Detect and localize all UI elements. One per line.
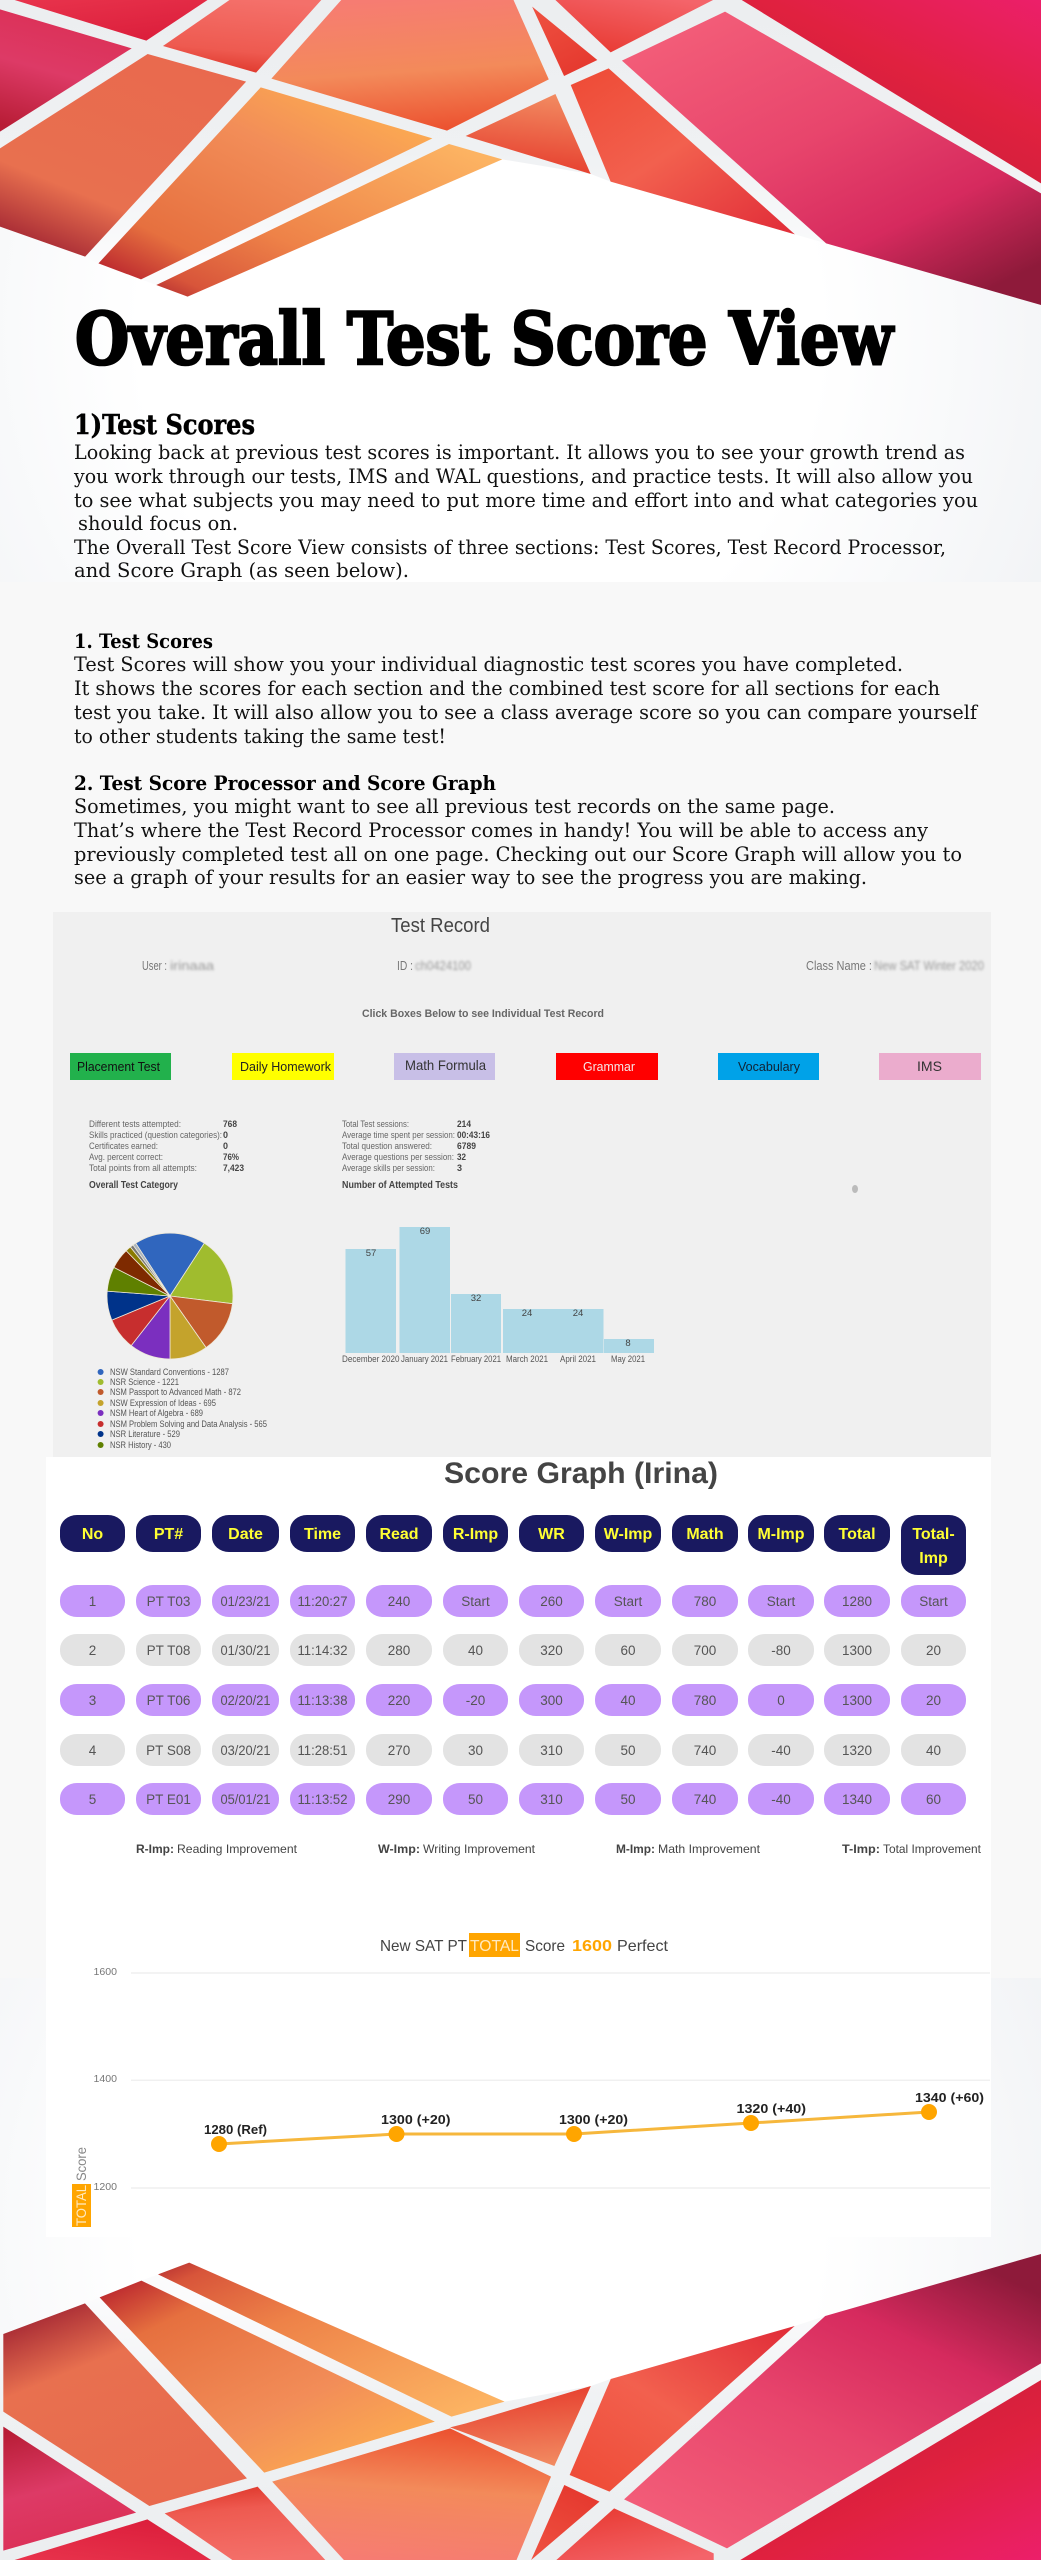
table row 4: 740: [694, 1743, 716, 1758]
stats: right column: 6789: [457, 1141, 476, 1151]
heading: 1) Test Scores: 1)Test Scores: [74, 410, 255, 441]
stats: right column: [342, 1119, 490, 1173]
table row 5: 1340: [842, 1792, 872, 1807]
table row 5: 05/01/21: [220, 1792, 270, 1807]
table row 5: 11:13:52: [298, 1792, 348, 1807]
bar chart: attempted tests: 8: [625, 1338, 631, 1349]
table row 4: -40: [771, 1743, 791, 1758]
pie legend: NSR History - 430: [110, 1440, 171, 1450]
table abbreviations key: Total Improvement: [883, 1842, 982, 1856]
user info row: ID :: [397, 958, 413, 973]
table row 1: 01/23/21: [220, 1594, 270, 1609]
chart headings: Overall Test Category: [89, 1180, 178, 1191]
line chart: total score: 1280 (Ref): [204, 2122, 267, 2137]
category buttons: Vocabulary: [738, 1059, 800, 1074]
bar chart: attempted tests: 57: [366, 1248, 376, 1259]
intro paragraph: should focus on.: [78, 511, 238, 535]
table row 4: PT S08: [146, 1743, 191, 1758]
table row 1: Start: [461, 1594, 490, 1609]
section 1 text: Test Scores will show you your individual diagnostic test scores you have completed.: [74, 652, 903, 676]
table row 1: Start: [614, 1594, 643, 1609]
table header: WR: [538, 1526, 565, 1543]
section 2 text: [74, 771, 962, 889]
bar chart: attempted tests: February 2021: [451, 1354, 501, 1364]
user info row: Class Name :: [806, 958, 872, 973]
table row 1: 240: [388, 1594, 410, 1609]
bar chart: attempted tests: March 2021: [506, 1354, 548, 1364]
bottom geometric banner: [0, 2254, 1041, 2560]
table row 3: 220: [388, 1693, 410, 1708]
table header: Total-: [912, 1526, 955, 1543]
table row 5: PT E01: [146, 1792, 191, 1807]
table row 1: [60, 1585, 966, 1617]
line chart: total score: 1340 (+60): [915, 2090, 984, 2105]
table row 3: -20: [466, 1693, 485, 1708]
table abbreviations key: T-Imp:: [842, 1842, 880, 1856]
stats: left column: 76%: [223, 1152, 239, 1162]
pie legend: NSM Heart of Algebra - 689: [110, 1408, 203, 1418]
line chart title: [380, 1933, 669, 1957]
category buttons: Daily Homework: [240, 1059, 331, 1074]
category buttons: [70, 1053, 981, 1080]
table abbreviations key: R-Imp:: [136, 1842, 174, 1856]
table row 2: [60, 1634, 966, 1666]
table row 1: 780: [694, 1594, 716, 1609]
line chart: total score: 1400: [94, 2074, 117, 2085]
intro paragraph: [73, 440, 978, 582]
user info row: User :: [142, 958, 167, 973]
pie legend: NSR Literature - 529: [110, 1429, 180, 1439]
pie legend: NSW Expression of Ideas - 695: [110, 1398, 216, 1408]
table row 4: 11:28:51: [298, 1743, 348, 1758]
table row 4: 1320: [842, 1743, 872, 1758]
table abbreviations key: Writing Improvement: [423, 1842, 536, 1856]
table row 2: 11:14:32: [298, 1643, 348, 1658]
stats: left column: 7,423: [223, 1163, 244, 1173]
pie legend: [98, 1367, 267, 1450]
table row 4: 03/20/21: [220, 1743, 270, 1758]
pie legend: NSW Standard Conventions - 1287: [110, 1367, 229, 1377]
table row 4: 4: [89, 1743, 97, 1758]
table row 3: 20: [926, 1693, 941, 1708]
table row 5: 50: [620, 1792, 636, 1807]
table header: Time: [304, 1526, 341, 1543]
stats: left column: Certificates earned:: [89, 1141, 158, 1151]
section 2 text: Sometimes, you might want to see all previous test records on the same page.: [74, 794, 835, 818]
category buttons: Grammar: [583, 1059, 636, 1074]
table header: Math: [686, 1526, 724, 1543]
table row 1: 1: [89, 1594, 96, 1609]
stats: right column: Average questions per session:: [342, 1152, 454, 1162]
table row 3: 300: [540, 1693, 563, 1708]
table row 2: 01/30/21: [220, 1643, 270, 1658]
user info row: [142, 958, 984, 973]
table row 2: 700: [694, 1643, 716, 1658]
bar chart: attempted tests: April 2021: [560, 1354, 596, 1364]
stats: right column: Average skills per session:: [342, 1163, 435, 1173]
bar chart: attempted tests: January 2021: [401, 1354, 448, 1364]
line chart title: TOTAL: [470, 1938, 519, 1955]
table row 2: PT T08: [147, 1643, 190, 1658]
stats: right column: 3: [457, 1163, 462, 1173]
small blurred mark: [852, 1185, 858, 1193]
stats: right column: Total Test sessions:: [342, 1119, 409, 1129]
section 2 text: previously completed test all on one page. Checking out our Score Graph will allow you to: [74, 842, 962, 866]
line chart: total score: 1300 (+20): [381, 2112, 450, 2127]
stats: left column: 0: [223, 1141, 228, 1151]
table header: Total: [838, 1526, 876, 1543]
stats: right column: 00:43:16: [457, 1130, 490, 1140]
line chart: total score: TOTAL: [73, 2185, 89, 2226]
line chart title: New SAT PT: [380, 1938, 467, 1955]
pie chart: [107, 1233, 233, 1359]
table header: R-Imp: [453, 1526, 498, 1543]
table row 3: 11:13:38: [298, 1693, 348, 1708]
category buttons: IMS: [917, 1058, 942, 1074]
table row 2: 40: [468, 1643, 483, 1658]
table row 5: 310: [540, 1792, 563, 1807]
bar chart: attempted tests: December 2020: [342, 1354, 400, 1364]
section 2 text: see a graph of your results for an easier way to see the progress you are making.: [74, 865, 867, 889]
table row 3: 3: [89, 1693, 96, 1708]
table row 5: 60: [926, 1792, 941, 1807]
table row 5: 5: [89, 1792, 96, 1807]
table row 1: 260: [540, 1594, 563, 1609]
table abbreviations key: Reading Improvement: [177, 1842, 298, 1856]
line chart: total score: 1300 (+20): [559, 2112, 628, 2127]
table row 4: [60, 1734, 966, 1766]
table row 5: -40: [771, 1792, 791, 1807]
table row 5: 290: [388, 1792, 410, 1807]
table row 3: 0: [777, 1693, 785, 1708]
table row 2: 1300: [842, 1643, 872, 1658]
table row 2: 60: [620, 1643, 636, 1658]
stats: right column: 32: [457, 1152, 466, 1162]
table header: No: [82, 1526, 103, 1543]
stats: left column: 768: [223, 1119, 237, 1129]
pie legend: NSM Problem Solving and Data Analysis - 565: [110, 1419, 267, 1429]
table row 2: 20: [926, 1643, 941, 1658]
table header: W-Imp: [604, 1526, 652, 1543]
line chart title: 1600: [572, 1938, 612, 1955]
table row 1: Start: [919, 1594, 948, 1609]
table row 2: 280: [388, 1643, 410, 1658]
user info row: irinaaa: [170, 958, 215, 973]
bar chart: attempted tests: 24: [573, 1308, 583, 1319]
score graph heading: Score Graph (Irina): [444, 1457, 718, 1490]
table row 2: -80: [771, 1643, 791, 1658]
line chart: total score: 1600: [94, 1967, 117, 1978]
chart headings: [89, 1180, 458, 1191]
intro paragraph: and Score Graph (as seen below).: [74, 558, 409, 582]
panel: test record: [53, 912, 991, 1457]
table row 3: PT T06: [147, 1693, 190, 1708]
line chart: total score: 1320 (+40): [736, 2101, 806, 2116]
table row 4: 30: [468, 1743, 483, 1758]
intro paragraph: Looking back at previous test scores is important. It allows you to see your growth trend as: [74, 440, 965, 464]
table header: PT#: [154, 1526, 183, 1543]
table row 4: 40: [926, 1743, 941, 1758]
table row 3: 02/20/21: [220, 1693, 270, 1708]
table row 4: 310: [540, 1743, 563, 1758]
bar chart: attempted tests: 32: [471, 1293, 481, 1304]
intro paragraph: The Overall Test Score View consists of three sections: Test Scores, Test Record Processor,: [74, 535, 946, 559]
section 1 text: test you take. It will also allow you to see a class average score so you can compare yourself: [74, 700, 979, 724]
table row 5: 740: [694, 1792, 716, 1807]
stats: right column: Average time spent per session:: [342, 1130, 455, 1140]
test record heading: Test Record: [391, 915, 490, 937]
stats: left column: 0: [223, 1130, 228, 1140]
table row 5: [60, 1783, 966, 1815]
table row 1: PT T03: [147, 1594, 190, 1609]
section 1 text: 1. Test Scores: [74, 629, 213, 653]
line chart: total score: [72, 1967, 990, 2227]
table row 4: 50: [620, 1743, 636, 1758]
line chart title: Perfect: [617, 1938, 669, 1955]
table row 3: 780: [694, 1693, 716, 1708]
stats: left column: Different tests attempted:: [89, 1119, 181, 1129]
section 2 text: That’s where the Test Record Processor comes in handy! You will be able to access any: [74, 818, 929, 842]
intro paragraph: you work through our tests, IMS and WAL questions, and practice tests. It will also allow you: [73, 464, 973, 488]
table header: Date: [228, 1526, 263, 1543]
line chart: total score: 1200: [94, 2182, 117, 2193]
table row 2: 2: [89, 1643, 96, 1658]
section 2 text: 2. Test Score Processor and Score Graph: [74, 771, 496, 795]
stats: left column: Avg. percent correct:: [89, 1152, 163, 1162]
top geometric banner: [0, 0, 1041, 305]
pie legend: NSM Passport to Advanced Math - 872: [110, 1387, 241, 1397]
section 1 text: [74, 629, 979, 748]
chart headings: Number of Attempted Tests: [342, 1180, 458, 1191]
table abbreviations key: M-Imp:: [616, 1842, 655, 1856]
table row 3: 40: [620, 1693, 636, 1708]
bar chart: attempted tests: 24: [522, 1308, 532, 1319]
table row 1: 1280: [842, 1594, 872, 1609]
section 1 text: to other students taking the same test!: [74, 724, 446, 748]
table header: Read: [379, 1526, 419, 1543]
bar chart: attempted tests: May 2021: [611, 1354, 645, 1364]
line chart title: Score: [525, 1938, 565, 1955]
stats: right column: Total question answered:: [342, 1141, 432, 1151]
stats: left column: Total points from all attempts:: [89, 1163, 197, 1173]
user info row: ch0424100: [415, 958, 471, 973]
title: Overall Test Score View: [75, 296, 895, 381]
table row 1: Start: [767, 1594, 796, 1609]
stats: right column: 214: [457, 1119, 471, 1129]
bar chart: attempted tests: 69: [420, 1226, 430, 1237]
section 1 text: It shows the scores for each section and the combined test score for all sections for each: [74, 676, 940, 700]
line chart: total score: Score: [73, 2147, 89, 2181]
table header: [60, 1515, 966, 1575]
table row 4: 270: [388, 1743, 410, 1758]
table row 2: 320: [540, 1643, 563, 1658]
stats: left column: Skills practiced (question categories):: [89, 1130, 222, 1140]
table header: Imp: [919, 1550, 948, 1567]
user info row: New SAT Winter 2020: [874, 958, 984, 973]
bar chart: attempted tests: [342, 1226, 654, 1364]
pie legend: NSR Science - 1221: [110, 1377, 179, 1387]
table row 3: 1300: [842, 1693, 872, 1708]
category buttons: Placement Test: [77, 1059, 160, 1074]
intro paragraph: to see what subjects you may need to put more time and effort into and what categories you: [74, 488, 978, 512]
table header: M-Imp: [757, 1526, 805, 1543]
category buttons: Math Formula: [405, 1057, 486, 1073]
stats: left column: [89, 1119, 244, 1173]
table row 3: [60, 1684, 966, 1716]
instruction: Click Boxes Below to see Individual Test Record: [362, 1008, 604, 1020]
table abbreviations key: Math Improvement: [658, 1842, 761, 1856]
table abbreviations key: [136, 1842, 982, 1856]
table row 1: 11:20:27: [298, 1594, 348, 1609]
table abbreviations key: W-Imp:: [378, 1842, 420, 1856]
panel: score graph: [46, 1457, 991, 2237]
table row 5: 50: [468, 1792, 483, 1807]
